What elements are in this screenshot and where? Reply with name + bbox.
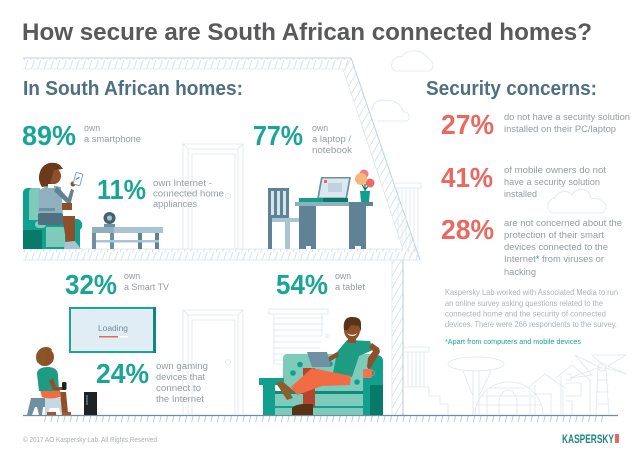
icon: laptop	[299, 177, 351, 202]
stat: 28%: protection of their smart	[504, 230, 605, 240]
window blinds	[269, 309, 328, 364]
logo: KASPERSKY	[562, 432, 614, 446]
stat: 32% smart TV: 32%	[65, 269, 117, 300]
stat: 41%: have a security solution	[504, 177, 600, 187]
stat: 77% laptop: 77%	[253, 120, 303, 151]
stat: 24% gaming devices: 24%	[96, 358, 149, 389]
stat: 24% gaming devices	[96, 358, 208, 404]
stat: 24% gaming devices: connect to	[156, 383, 201, 393]
stat: 77% laptop: notebook	[312, 145, 353, 155]
stat: 54% tablet: 54%	[276, 269, 328, 300]
stat: 28%: hacking	[504, 267, 536, 277]
survey note: Kaspersky Lab worked with Associated Media to run	[445, 288, 618, 297]
neighbourhood scene	[448, 355, 627, 415]
icon: phone	[73, 172, 83, 186]
stat: 77% laptop: own	[312, 123, 328, 133]
stat: 41%	[441, 162, 607, 199]
tree	[448, 357, 504, 371]
stat: 11% appliances	[97, 174, 224, 209]
stat: 28%	[441, 214, 622, 277]
illustration: child gaming on stool	[27, 347, 97, 415]
ground hatching	[40, 415, 603, 422]
icon: tablet	[307, 352, 331, 367]
stat: 89% smartphone: own	[84, 123, 100, 133]
stat: 11% appliances: 11%	[97, 174, 146, 205]
stat: 28%: 28%	[441, 214, 494, 245]
stat: 89% smartphone: a smartphone	[84, 134, 141, 144]
icon: game console	[84, 392, 97, 415]
stat: 32% smart TV: own	[124, 271, 140, 281]
stat: 32% smart TV: a Smart TV	[124, 282, 169, 292]
stat: 41%: 41%	[441, 162, 493, 193]
heading: homes: In South African homes:	[23, 77, 243, 100]
survey note: connected home and the security of connected	[445, 310, 606, 318]
stat: 11% appliances: own Internet -	[153, 178, 212, 188]
icon: flower pot	[355, 170, 374, 202]
stat: 41%: installed	[504, 189, 537, 199]
stat: 24% gaming devices: devices that	[156, 372, 206, 382]
icon: webcam	[104, 212, 116, 224]
illustration: table with webcam	[92, 212, 163, 249]
ground line	[23, 414, 618, 416]
illustration: man on sofa with tablet	[259, 317, 383, 415]
stat: 54% tablet	[276, 269, 366, 300]
roof band	[23, 58, 351, 69]
stat: 24% gaming devices: own gaming	[156, 361, 208, 371]
background clouds	[372, 51, 606, 213]
stat: 27%: 27%	[441, 109, 494, 140]
stat: 89% smartphone	[22, 120, 141, 151]
stat: 54% tablet: own	[335, 271, 351, 281]
illustration: desk with laptop, chair and plant	[268, 170, 374, 249]
stat: 27%	[441, 109, 630, 140]
roof slope	[343, 58, 420, 259]
stat: 28%: are not concerned about the	[504, 218, 622, 228]
icon: mug	[363, 369, 374, 378]
stat: 77% laptop	[253, 120, 353, 155]
survey note: an online survey asking questions related to the	[445, 299, 603, 308]
palm	[570, 355, 627, 415]
title: How secure are South African connected homes?	[22, 19, 592, 46]
houses	[528, 374, 565, 415]
survey note	[445, 288, 618, 329]
stat: 27%: do not have a security solution	[504, 112, 630, 122]
stat: 11% appliances: connected home	[153, 188, 224, 198]
floor band	[23, 249, 420, 260]
copyright: © 2017 AO Kaspersky Lab. All Rights Reserved	[23, 436, 157, 444]
stat: 28%: Internet* from viruses or	[504, 254, 604, 264]
heading: security concerns: Security concerns:	[426, 77, 597, 100]
stat: 89% smartphone: 89%	[22, 120, 76, 151]
illustration: woman in armchair with phone	[23, 163, 83, 249]
icon: game controller	[62, 382, 66, 390]
balconies	[395, 183, 448, 415]
stat: 54% tablet: a tablet	[335, 282, 366, 292]
stat: 32% smart TV	[65, 269, 169, 300]
illustration: smart TV	[69, 307, 156, 353]
outer wall	[392, 260, 403, 415]
stat: 41%: of mobile owners do not	[504, 165, 607, 175]
stat: 28%: devices connected to the	[504, 242, 608, 252]
house structure	[23, 58, 618, 422]
stat: 27%: installed on their PC/laptop	[504, 124, 616, 134]
footnote: *Apart from computers and mobile devices	[445, 337, 581, 346]
stat: 77% laptop: a laptop /	[312, 134, 352, 144]
survey note: devices. There were 266 respondents to the survey.	[445, 320, 617, 329]
illustration: smart TV: Loading	[98, 324, 128, 333]
doors	[183, 144, 243, 415]
stat: 24% gaming devices: the Internet	[156, 394, 205, 404]
igloo	[475, 382, 543, 415]
stat: 11% appliances: appliances	[153, 199, 198, 209]
